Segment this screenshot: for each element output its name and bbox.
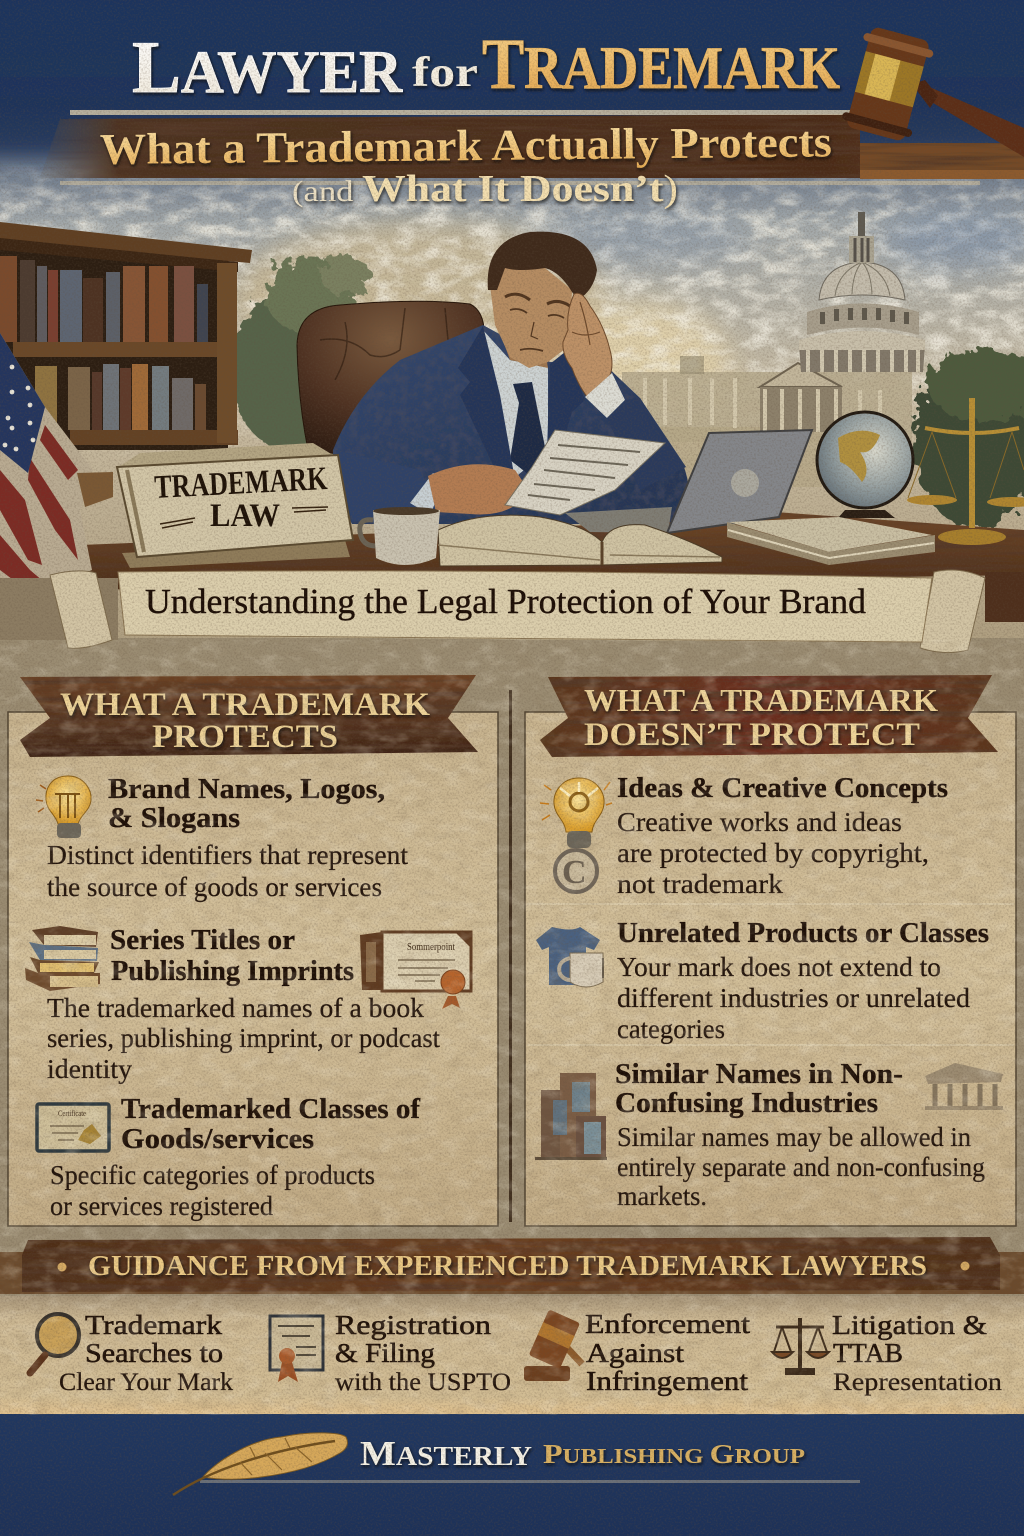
necktie: [510, 382, 548, 474]
panel banner right: [540, 675, 998, 757]
facial details: [505, 294, 570, 351]
paper document: [505, 430, 665, 515]
service: trademark searches: Clear Your Mark: [59, 1369, 234, 1396]
main title: TRADEMARK: [482, 24, 840, 104]
item: ideas: Creative works and ideas: [617, 807, 902, 837]
service: enforcement: Infringement: [586, 1366, 749, 1396]
item: ideas: are protected by copyright,: [617, 838, 929, 868]
service: litigation: Litigation &: [832, 1310, 987, 1340]
item: series titles: Publishing Imprints: [111, 955, 354, 987]
desk side panel: [985, 572, 1024, 622]
lower left stonework: [0, 578, 118, 640]
item: similar names: [615, 1058, 985, 1211]
icon: temple: [925, 1063, 1003, 1110]
guidance banner: GUIDANCE FROM EXPERIENCED TRADEMARK LAWYERS: [88, 1251, 927, 1282]
background tree left: [230, 255, 370, 450]
background: navy sky: [0, 0, 1024, 660]
suit torso: [333, 325, 690, 524]
desk: [80, 512, 1024, 590]
open book on desk: [438, 515, 722, 566]
globe: [817, 412, 913, 518]
service: litigation: TTAB: [833, 1338, 903, 1368]
panel banner right: DOESN’T PROTECT: [584, 717, 920, 753]
footer: navy: [0, 1414, 1024, 1536]
dome colonnade: [799, 331, 925, 372]
icon: light bulb: [36, 776, 91, 838]
item: similar names: entirely separate and non-confusing: [617, 1152, 985, 1182]
item: series titles: series, publishing imprint, or podcast: [47, 1023, 440, 1053]
top header band: navy: [0, 0, 1024, 155]
service: registration: & Filing: [335, 1338, 435, 1368]
icon: class certificate: [37, 1104, 109, 1151]
item: unrelated products: Your mark does not extend to: [617, 952, 941, 982]
capitol building: [622, 212, 925, 487]
neck: [497, 325, 548, 368]
item: unrelated products: Unrelated Products or Classes: [617, 917, 989, 949]
service: registration: [335, 1310, 511, 1396]
item: classes: Specific categories of products: [50, 1160, 375, 1190]
item: brand names: & Slogans: [108, 802, 240, 834]
american flag: [0, 333, 113, 587]
item: unrelated products: categories: [617, 1014, 725, 1044]
icon: feather quill: [173, 1433, 347, 1495]
panel banner left: PROTECTS: [152, 719, 338, 755]
raised arm and hand: [563, 293, 612, 398]
trademark law book: [117, 443, 353, 568]
icon: office buildings: [535, 1073, 607, 1160]
item: ideas: [617, 772, 948, 899]
item: series titles: Series Titles or: [110, 924, 295, 956]
item: similar names: Similar Names in Non-: [615, 1058, 903, 1090]
bookcase: [0, 222, 252, 450]
panel banner left: [20, 675, 478, 757]
book stack on right: [727, 517, 935, 565]
icon: idea bulb with copyright: [540, 778, 612, 892]
face: [490, 268, 572, 368]
subtitle: [100, 117, 832, 210]
scales of justice on desk: [907, 398, 1024, 545]
item: ideas: not trademark: [617, 869, 784, 899]
item: similar names: markets.: [617, 1181, 707, 1211]
icon: certificate with ribbon: [360, 932, 471, 1009]
left arm and hand: [336, 450, 440, 522]
service: litigation: Representation: [833, 1369, 1003, 1396]
item: similar names: Similar names may be allowed in: [617, 1122, 971, 1152]
shirt and collar: [483, 330, 548, 480]
item: brand names: [47, 773, 409, 902]
sky clouds: [0, 160, 1024, 460]
subtitle: What a Trademark Actually Protects: [100, 117, 832, 174]
item: classes: Goods/services: [121, 1123, 314, 1155]
icon: gavel small: [524, 1309, 582, 1381]
lower parchment background: [0, 638, 1024, 1418]
books top shelf: [0, 256, 208, 342]
laptop: [565, 430, 812, 533]
center divider: [509, 690, 512, 1222]
guidance banner: [0, 1237, 1024, 1294]
main title: for: [412, 50, 478, 96]
lapels: [458, 326, 585, 480]
service: enforcement: Against: [586, 1338, 685, 1368]
publisher name: [360, 1434, 805, 1473]
service: trademark searches: Searches to: [85, 1338, 223, 1368]
trademark law book: TRADEMARK: [154, 461, 328, 506]
icon: shirt and mug: [536, 927, 603, 987]
item: brand names: Brand Names, Logos,: [108, 773, 385, 805]
subtitle: (and What It Doesn’t ): [292, 168, 678, 210]
item: series titles: [47, 924, 440, 1084]
icon: book stack: [25, 926, 100, 991]
icon: certificate with ribbon: Sommerpoint: [407, 941, 455, 953]
panel: what a trademark doesn't protect: [525, 675, 1016, 1226]
item: brand names: Distinct identifiers that represent: [47, 840, 409, 870]
panel: what a trademark protects: [8, 675, 498, 1226]
icon: class certificate: Certificate: [58, 1109, 86, 1118]
gavel: [840, 24, 1024, 157]
panel banner right: WHAT A TRADEMARK: [584, 682, 938, 718]
trademark law book: LAW: [210, 498, 280, 534]
coffee cup: [360, 507, 440, 565]
services strip: [0, 1296, 1024, 1414]
item: series titles: The trademarked names of a book: [47, 993, 425, 1023]
icon: scales: [772, 1318, 829, 1374]
tree right: [913, 349, 1024, 528]
item: classes: or services registered: [50, 1191, 273, 1221]
service: trademark searches: [59, 1310, 234, 1396]
item: brand names: the source of goods or services: [47, 872, 382, 902]
service: enforcement: [585, 1309, 751, 1396]
lawyer figure: [333, 232, 690, 524]
books lower shelf: [35, 364, 206, 430]
item: unrelated products: different industries or unrelated: [617, 983, 971, 1013]
item: similar names: Confusing Industries: [615, 1087, 878, 1119]
service: enforcement: Enforcement: [585, 1309, 751, 1339]
item: series titles: identity: [47, 1054, 133, 1084]
icon: idea bulb with copyright: C: [562, 854, 587, 891]
service: litigation: [832, 1310, 1003, 1396]
office chair: [297, 301, 484, 455]
item: classes: [50, 1093, 420, 1221]
service: registration: Registration: [335, 1310, 492, 1340]
panel banner left: WHAT A TRADEMARK: [60, 687, 430, 723]
service: trademark searches: Trademark: [85, 1310, 223, 1340]
dome upper drum: [807, 304, 919, 335]
banner text: Understanding the Legal Protection of Your Brand: [145, 582, 867, 621]
scroll banner: [50, 570, 985, 653]
icon: magnifying glass: [30, 1314, 79, 1373]
publisher name: MASTERLY: [360, 1434, 532, 1473]
item: unrelated products: [617, 917, 989, 1044]
hair: [488, 232, 597, 300]
item: classes: Trademarked Classes of: [121, 1093, 420, 1125]
icon: registration document: [270, 1316, 323, 1382]
publisher name: PUBLISHING GROUP: [543, 1439, 805, 1469]
item: ideas: Ideas & Creative Concepts: [617, 772, 948, 804]
service: registration: with the USPTO: [335, 1369, 511, 1396]
main title: LAWYER: [132, 27, 403, 109]
wooden subtitle band: [40, 110, 1024, 185]
main title: [132, 24, 840, 109]
footer rule: [200, 1480, 860, 1483]
